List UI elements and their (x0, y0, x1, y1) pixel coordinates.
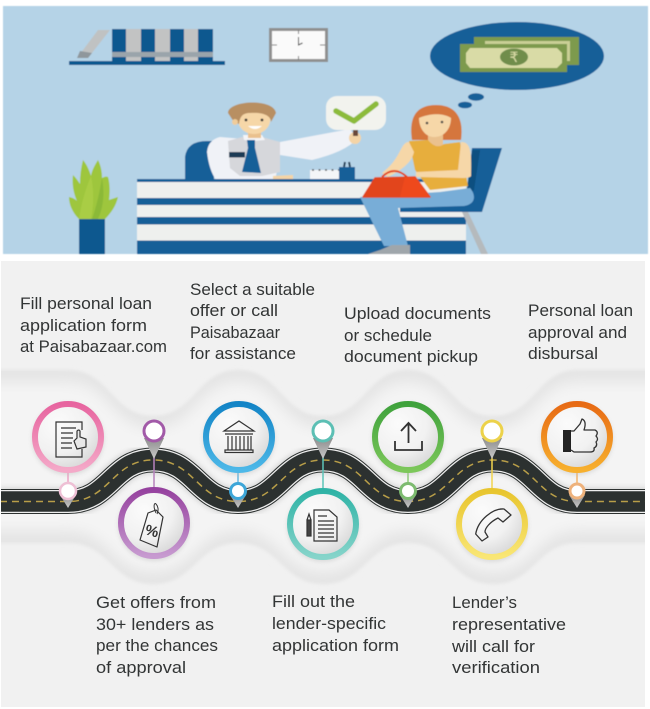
text: step 6 caption: verification (452, 658, 540, 677)
text: step 2 caption: 30+ lenders as (96, 615, 214, 634)
text: step 6 caption: Lender’s (452, 593, 517, 612)
raised wave band behind road (0, 370, 650, 584)
customer (360, 105, 474, 254)
wall clock (270, 30, 326, 60)
customer's chair (400, 148, 502, 254)
text: step 7 caption: disbursal (528, 344, 598, 363)
plant in pot (69, 160, 118, 254)
process panel: steps roadmap (0, 261, 650, 707)
text: step 6 caption: representative (452, 615, 566, 634)
text: step 2 caption: Get offers from (96, 593, 216, 612)
text: step 2 caption: per the chances (96, 636, 218, 655)
step 5: green circle, upload icon (372, 403, 444, 508)
step 7: orange circle, thumbs up icon (541, 403, 613, 508)
loan officer (207, 102, 361, 180)
text: step 4 caption: application form (272, 636, 399, 655)
text: step 1 caption: at Paisabazaar.com (20, 337, 167, 356)
step 6: yellow circle, telephone icon (456, 421, 528, 562)
step 4: teal circle, lender form icon (287, 421, 359, 562)
step 2: purple circle, discount tag icon: % (143, 522, 161, 541)
man's chair (185, 141, 214, 180)
thought bubble with rupee notes (430, 22, 604, 108)
step 3: blue circle, bank icon (203, 403, 275, 508)
text: step 3 caption: Select a suitable (190, 280, 315, 299)
text: step 2 caption: of approval (96, 658, 186, 677)
text: step 5 caption: document pickup (344, 347, 478, 366)
text: step 4 caption: lender-specific (272, 614, 387, 633)
bookshelf (69, 29, 225, 65)
text: step 7 caption: approval and (528, 323, 627, 342)
text: step 6 caption: will call for (451, 637, 535, 656)
text: step 5 caption: Upload documents (344, 304, 491, 323)
step 1: pink circle, application form icon (32, 403, 104, 508)
check mark sign (326, 96, 386, 130)
notepad and pen holder (310, 162, 355, 180)
desk (137, 179, 466, 254)
step 2: purple circle, discount tag icon (118, 421, 190, 561)
thought bubble with rupee notes: ₹ (510, 50, 519, 66)
text: step 3 caption: offer or call (190, 301, 278, 320)
illustration panel: loan officer and customer at desk (3, 6, 648, 254)
text: step 3 caption: Paisabazaar (190, 323, 280, 342)
text: step 7 caption: Personal loan (528, 301, 633, 320)
text: step 1 caption: Fill personal loan (20, 294, 152, 313)
text: step 1 caption: application form (20, 316, 147, 335)
winding road (0, 460, 650, 502)
text: step 5 caption: or schedule (344, 326, 432, 345)
text: step 4 caption: Fill out the (272, 592, 355, 611)
text: step 3 caption: for assistance (190, 344, 296, 363)
